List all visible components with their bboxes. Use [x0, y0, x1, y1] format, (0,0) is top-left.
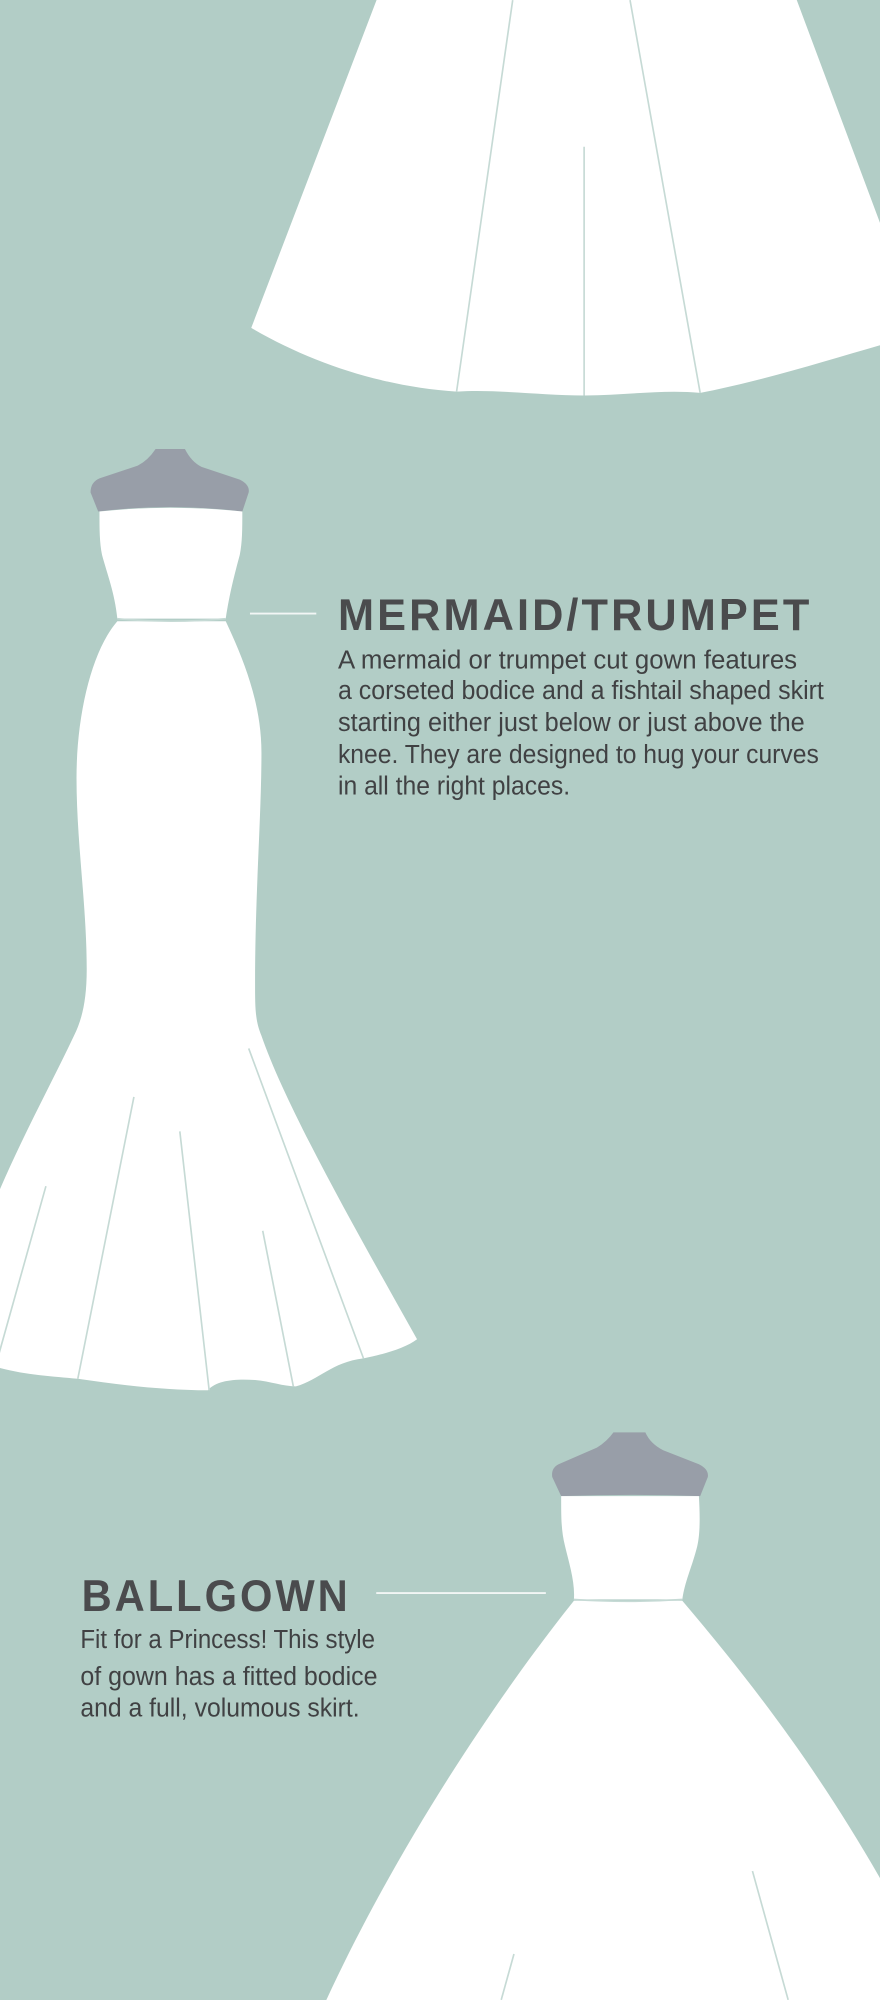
icon: mannequin bust	[552, 1432, 708, 1496]
text block: mermaid description: a corseted bodice and a fishtail shaped skirt	[338, 677, 824, 705]
icon: mannequin bust	[91, 449, 249, 512]
text block: ballgown description: Fit for a Princess! This style	[80, 1626, 375, 1654]
gown: mermaid/trumpet	[0, 449, 417, 1390]
text block: mermaid description: starting either just below or just above the	[338, 709, 805, 737]
text block: ballgown description	[80, 1626, 378, 1723]
leader line: ballgown	[376, 1592, 546, 1594]
text block: mermaid description: knee. They are designed to hug your curves	[338, 741, 819, 769]
gown: ballgown	[325, 1432, 880, 2000]
heading: ballgown: BALLGOWN	[82, 1572, 351, 1621]
text block: mermaid description	[338, 646, 824, 801]
leader line: mermaid	[250, 613, 316, 615]
bodice	[99, 508, 242, 619]
text block: mermaid description: A mermaid or trumpet cut gown features	[338, 646, 797, 674]
text block: ballgown description: and a full, volumous skirt.	[80, 1695, 360, 1723]
gown: bottom of previous dress skirt	[251, 0, 880, 395]
full skirt	[325, 1601, 880, 2000]
waist seam and skirt seams	[0, 619, 363, 1390]
waist seam and skirt seams	[501, 1599, 788, 2000]
heading: mermaid/trumpet: MERMAID/TRUMPET	[338, 591, 812, 640]
text block: mermaid description: in all the right places.	[338, 773, 570, 801]
text block: ballgown description: of gown has a fitted bodice	[80, 1663, 378, 1691]
fishtail skirt	[0, 621, 417, 1390]
bodice	[561, 1496, 700, 1599]
